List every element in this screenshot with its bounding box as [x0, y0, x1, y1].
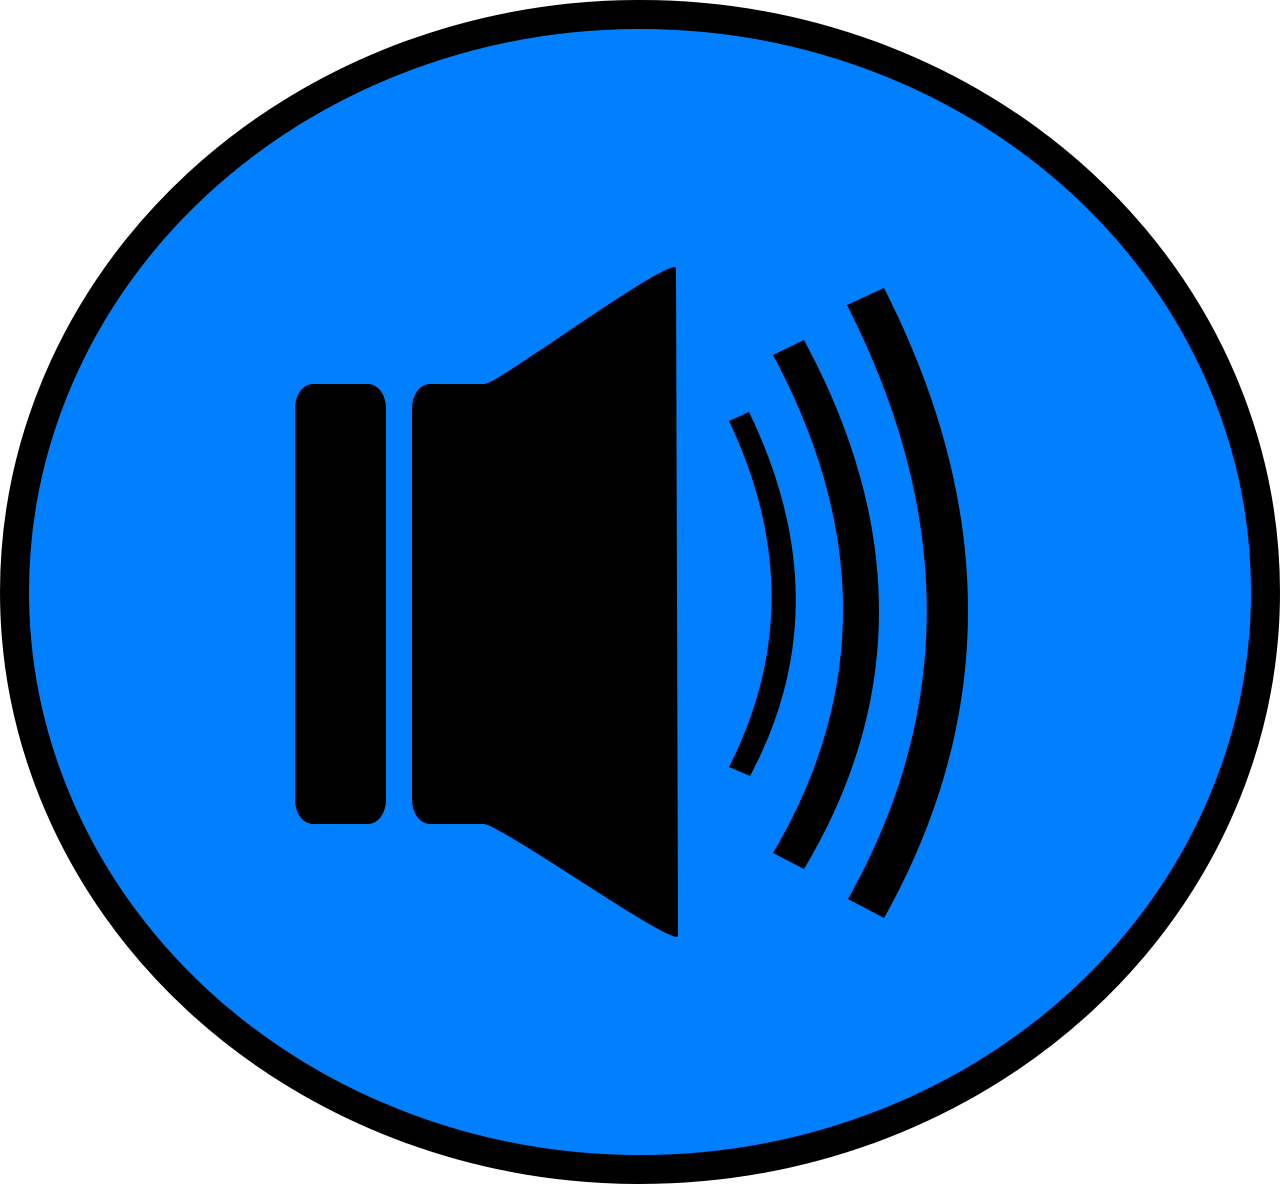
icon: large sound wave [847, 288, 968, 918]
icon: speaker magnet [295, 384, 386, 824]
icon: medium sound wave [773, 340, 879, 869]
icon: speaker cone [412, 267, 678, 937]
icon: small sound wave [729, 412, 796, 776]
